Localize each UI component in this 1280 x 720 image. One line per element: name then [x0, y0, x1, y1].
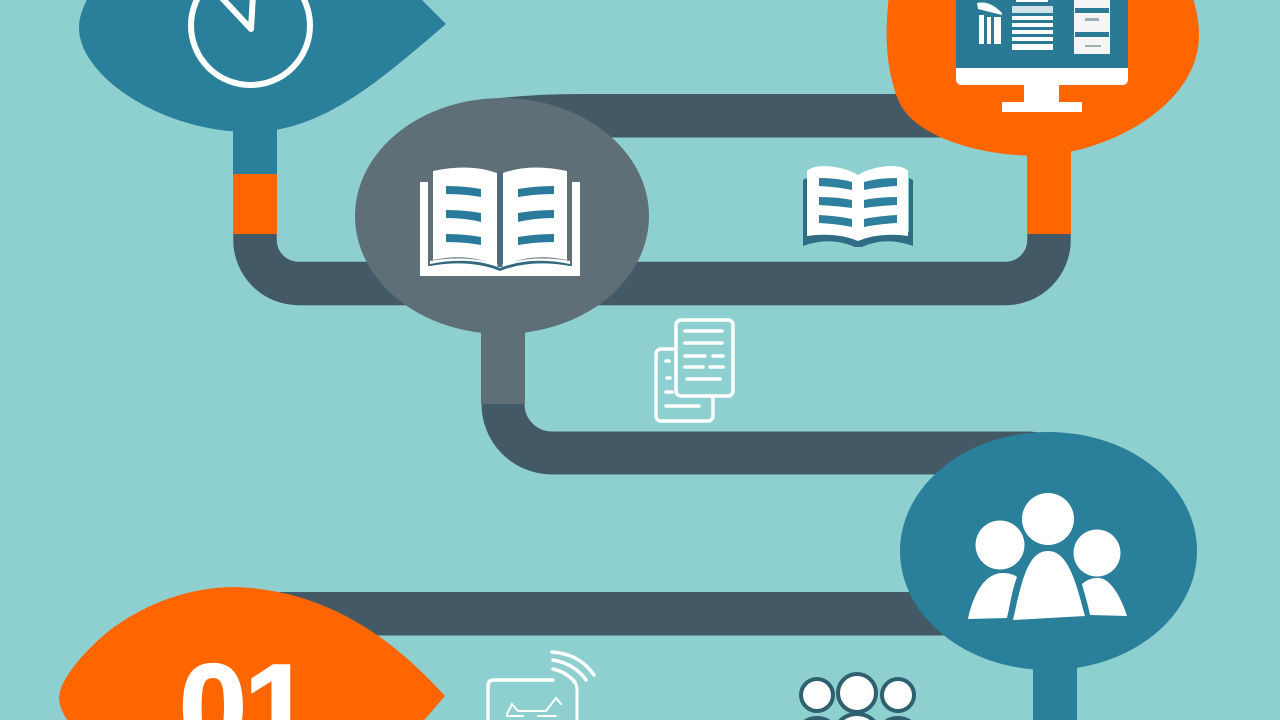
panel: step 01 leaf: [59, 587, 445, 720]
icon: documents: [656, 320, 733, 421]
connector: book to people: [481, 325, 1045, 474]
connector: book to monitor top bar: [500, 94, 945, 138]
connector: people to step 01: [280, 592, 960, 636]
icon: clock: [191, 0, 310, 85]
panel: people ellipse: [900, 432, 1197, 670]
icon: open book: [420, 167, 580, 276]
icon: device with signal: [488, 652, 594, 720]
icon: monitor: [956, 0, 1128, 112]
panel: clock leaf: [79, 0, 446, 132]
panel: monitor blob: [887, 0, 1199, 156]
icon: group of people: [795, 674, 920, 720]
connector: people stem: [1033, 660, 1077, 720]
connector: clock to book to monitor: [233, 125, 1071, 284]
panel: book ellipse: [355, 98, 649, 334]
icon: pillar chart: [977, 2, 1002, 44]
icon: side panel: [1074, 0, 1110, 54]
icon: three people: [968, 493, 1127, 620]
icon: small open book: [803, 166, 913, 247]
icon: text lines: [1012, 0, 1053, 50]
